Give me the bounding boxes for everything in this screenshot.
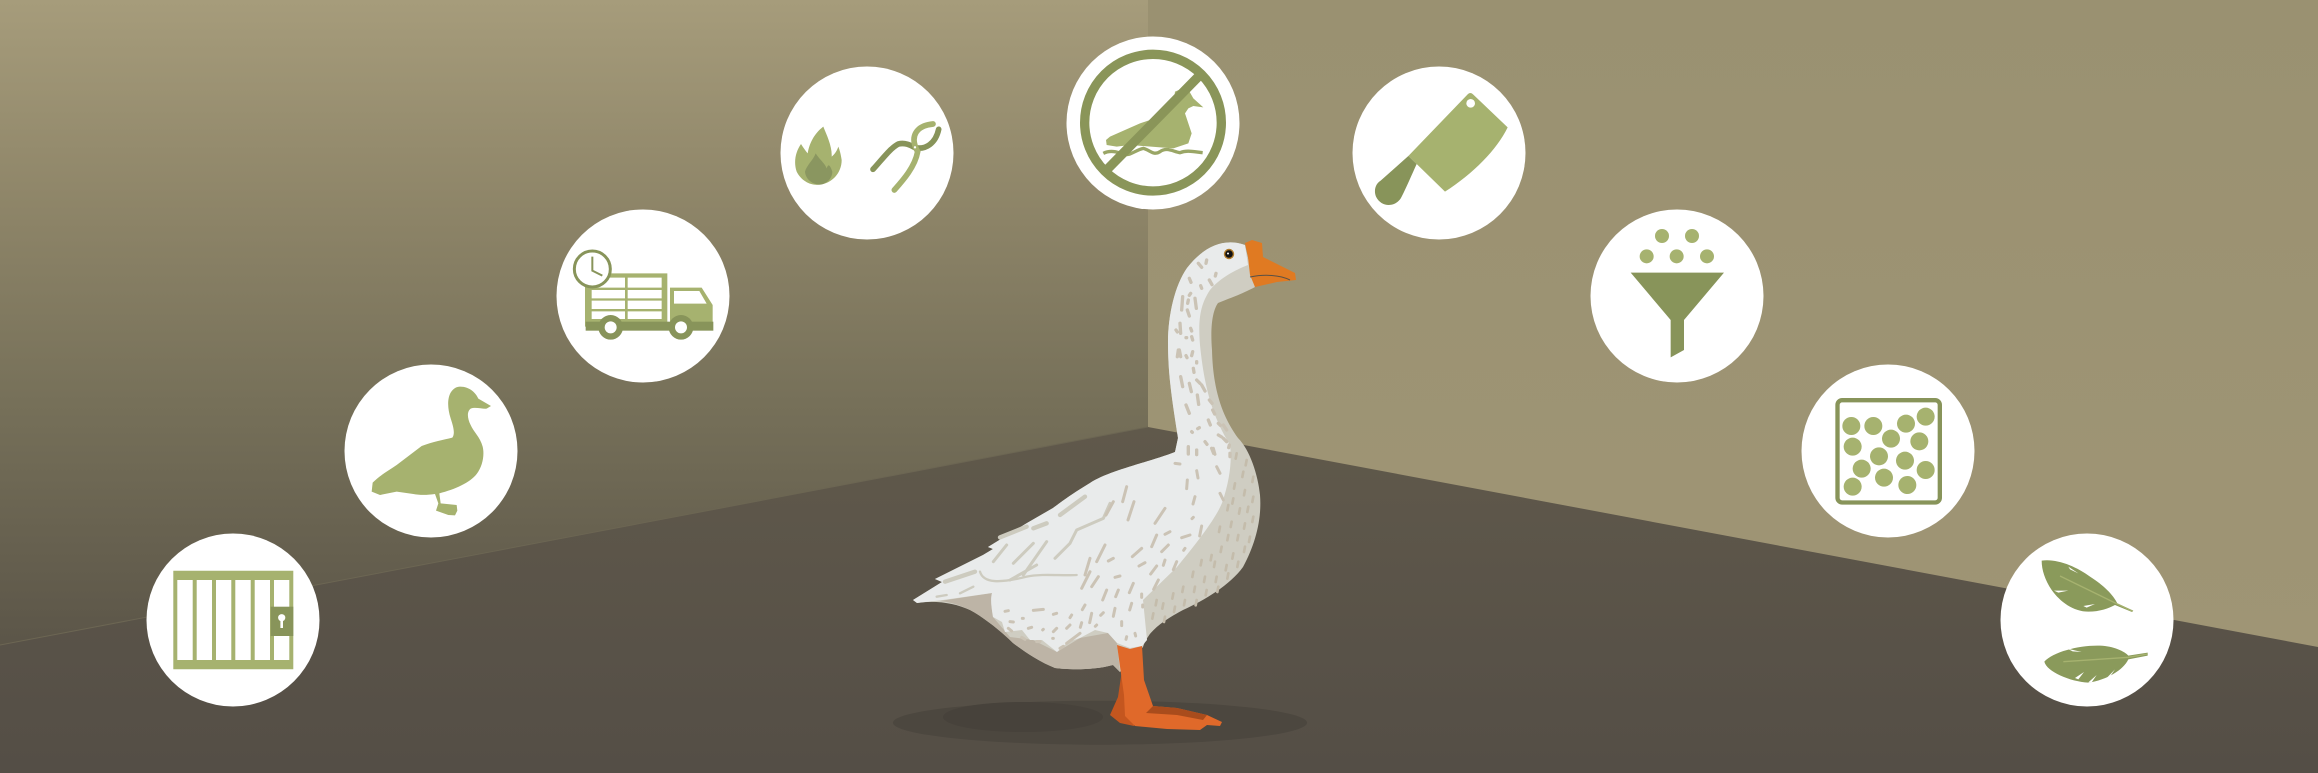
icon: funnel with pellets bbox=[1590, 210, 1764, 382]
icon: truck with clock bbox=[556, 210, 730, 382]
back toes bbox=[1110, 670, 1142, 726]
upper feather bbox=[2042, 560, 2133, 612]
truck wheels bbox=[598, 315, 693, 340]
neck speckles bbox=[1176, 260, 1230, 457]
icon: fire and pincers bbox=[780, 66, 954, 240]
goose body base bbox=[913, 242, 1260, 672]
truck chassis bbox=[586, 322, 713, 331]
body speckles bbox=[1005, 447, 1223, 648]
icon: no swimming duck bbox=[1066, 36, 1240, 210]
cage lock bbox=[271, 607, 293, 636]
right wall bbox=[1148, 0, 2318, 647]
icon: cage bbox=[146, 534, 320, 706]
clock bbox=[574, 251, 610, 287]
goose with shadow bbox=[893, 240, 1307, 745]
pellets bbox=[1640, 229, 1714, 263]
icon: cleaver bbox=[1352, 66, 1526, 240]
square frame bbox=[1837, 400, 1940, 502]
icon: pellets in square bbox=[1802, 364, 1974, 538]
swimming duck bbox=[1106, 87, 1203, 148]
pellet dots bbox=[1842, 408, 1935, 496]
beak mouth line bbox=[1250, 275, 1290, 280]
pincers bbox=[873, 124, 939, 190]
goose beak bbox=[1245, 240, 1296, 287]
icon: duck silhouette bbox=[344, 364, 518, 538]
icon: feathers bbox=[2000, 534, 2174, 706]
wing feather strokes bbox=[937, 497, 1110, 597]
floor bbox=[0, 420, 2318, 773]
prohibition ring bbox=[1085, 54, 1221, 191]
cleaver handle bbox=[1375, 156, 1417, 205]
funnel bbox=[1631, 273, 1724, 357]
goose belly bbox=[940, 593, 1120, 672]
truck cab bbox=[670, 288, 713, 327]
goose leg and foot bbox=[1117, 645, 1222, 730]
chest speckles bbox=[1152, 453, 1253, 622]
lower feather bbox=[2044, 646, 2148, 683]
toe shading bbox=[1146, 706, 1207, 720]
cleaver blade bbox=[1408, 93, 1508, 192]
goose eye bbox=[1224, 249, 1234, 259]
left wall bbox=[0, 0, 1148, 645]
floor shadow bbox=[893, 701, 1307, 745]
water waves bbox=[1103, 148, 1203, 155]
truck cargo bbox=[585, 273, 667, 327]
flame bbox=[795, 127, 842, 185]
goose white plumage bbox=[913, 242, 1248, 652]
inner flame bbox=[805, 153, 832, 185]
